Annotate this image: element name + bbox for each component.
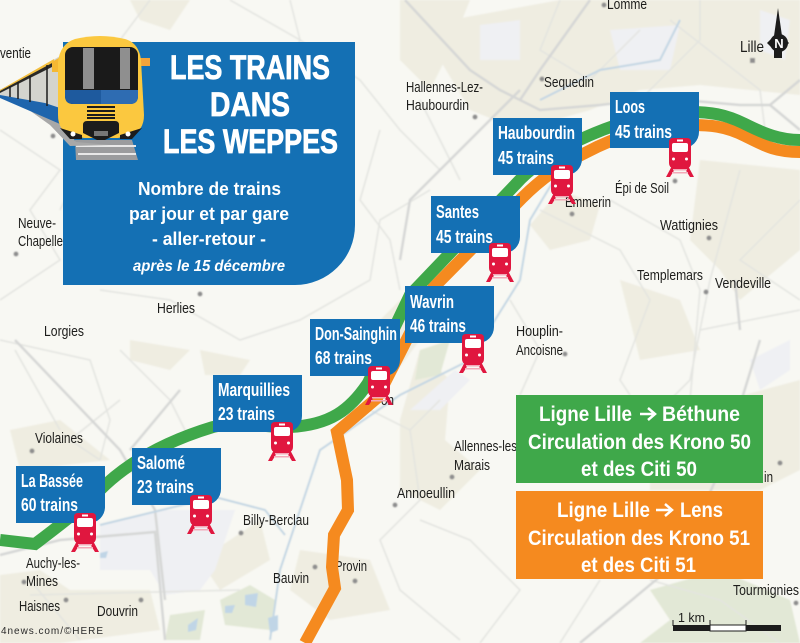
place names: Violaines [35,431,83,447]
place names: Allennes-les [454,439,517,455]
title: DANS [210,86,290,124]
station: Haubourdin [493,118,582,204]
station: Haubourdin: 45 trains [498,148,554,168]
legend: Lille-Bethune line: et des Citi 50 [581,458,697,481]
place names: Wattignies [660,218,718,234]
legend: Lille-Lens line: Lens [680,499,723,522]
place names: in [764,470,773,486]
station: Loos: Loos [615,97,645,117]
place names: Herlies [157,301,195,317]
icon: north compass [767,8,789,58]
station: Salome: 23 trains [137,477,194,497]
scale bar: 1 km [678,610,705,625]
station: Santes [431,196,520,282]
title: LES TRAINS [170,49,330,87]
legend: Lille-Bethune line: Ligne Lille [539,403,632,426]
place names: Sequedin [544,75,594,91]
place names: Emmerin [565,195,611,211]
station: Wavrin: Wavrin [410,292,454,312]
subtitle [129,179,289,275]
place names: Billy-Berclau [243,513,309,529]
station: Marquillies: Marquillies [218,380,290,400]
legend: Lille-Bethune line: Circulation des Krono 50 [528,431,751,454]
subtitle: par jour et par gare [129,204,289,224]
place names: Houplin- [516,324,563,340]
legend: Lille-Lens line [516,491,763,579]
station: La Bassee [16,466,105,552]
subtitle: Nombre de trains [138,179,281,199]
place names: on [381,393,394,409]
place names: Lorgies [44,324,84,340]
station: Don-Sainghin: Don-Sainghin [315,324,397,344]
icon: yellow train [0,36,150,160]
place names: Mines [26,574,58,590]
station: La Bassee: La Bassée [21,471,83,491]
legend: Lille-Bethune line: Béthune [662,403,740,426]
place names: Provin [335,559,367,575]
grey industrial areas [100,10,790,595]
station: Loos [610,92,699,177]
station: Salome [132,448,221,534]
station: Marquillies: 23 trains [218,404,275,424]
rivers [100,20,680,640]
place names: Neuve- [18,216,56,232]
station: Santes: Santes [436,202,479,222]
place names: Douvrin [97,604,138,620]
arrow: towards Bethune [640,408,655,420]
station: La Bassee: 60 trains [21,495,78,515]
place names: Annoeullin [397,486,455,502]
subtitle: après le 15 décembre [133,258,285,275]
station: Don-Sainghin [310,319,400,405]
place names: Épi de Soil [615,180,669,197]
station: Loos: 45 trains [615,122,672,142]
place names: Templemars [637,268,703,284]
legend: Lille-Lens line: Circulation des Krono 51 [528,527,750,550]
station: Wavrin [405,286,494,373]
place names: Marais [454,458,490,474]
subtitle: - aller-retour - [152,229,266,249]
arrow: towards Lens [656,504,672,516]
station: Santes: 45 trains [436,227,493,247]
legend: Lille-Lens line: et des Citi 51 [581,554,696,577]
lakes [100,551,278,633]
orange line: Lille to Lens [305,125,800,643]
place names: Hallennes-Lez- [406,80,483,96]
place names: Ancoisne [516,343,563,359]
green areas [165,340,800,643]
icon: north compass: N [774,36,784,51]
station: Marquillies [213,375,302,461]
title: LES WEPPES [163,123,338,161]
place names: Vendeville [715,276,771,292]
legend: Lille-Lens line: Ligne Lille [557,499,650,522]
title panel [63,42,355,285]
station: Wavrin: 46 trains [410,316,466,336]
scale bar [673,610,781,631]
legend: Lille-Bethune line [516,395,763,483]
place names: Bauvin [273,571,309,587]
place names: Haisnes [19,599,60,615]
station: Haubourdin: Haubourdin [498,123,575,143]
station: Don-Sainghin: 68 trains [315,348,372,368]
place names: ventie [0,46,31,62]
place names: Lille [740,39,764,56]
green line: Lille to Bethune [0,112,800,544]
credit: 4news.com/©HERE [1,626,103,637]
station: Salome: Salomé [137,453,185,473]
title [163,49,338,161]
place names: Haubourdin [406,98,469,114]
place names: Auchy-les- [26,556,80,572]
place names: Chapelle [18,234,63,250]
